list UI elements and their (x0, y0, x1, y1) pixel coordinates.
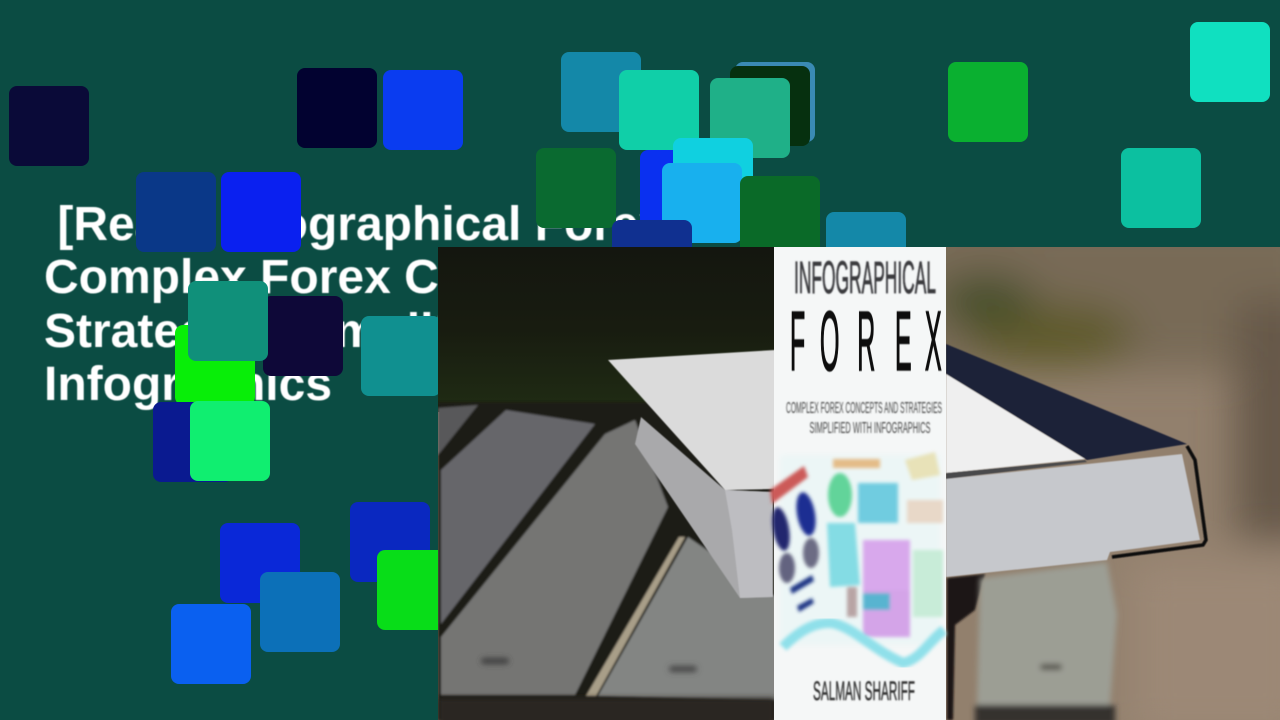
cover wave (783, 623, 944, 663)
square: electric blue (221, 172, 301, 252)
cover artwork (780, 455, 940, 645)
title: Complex Forex Concepts and (44, 251, 721, 304)
book cover: SALMAN SHARIFF (813, 676, 915, 706)
square: bright green (377, 550, 457, 630)
square: blue behind dark green (735, 62, 815, 142)
square: cyan (673, 138, 753, 218)
square: deep green (740, 176, 820, 256)
square: navy (9, 86, 89, 166)
square: lime (175, 325, 255, 405)
cover subtitle: SIMPLIFIED WITH INFOGRAPHICS (810, 420, 930, 437)
open book (608, 344, 1206, 598)
square: teal blue (826, 212, 906, 292)
square: indigo (612, 220, 692, 300)
square: dark violet (263, 296, 343, 376)
bench planks (438, 402, 775, 720)
book cover (769, 247, 946, 720)
square: sea green (1121, 148, 1201, 228)
title: Infographics (44, 358, 332, 411)
square: royal blue (383, 70, 463, 150)
square: green (948, 62, 1028, 142)
square: blue (640, 150, 720, 230)
right bench leg (947, 562, 1117, 720)
square: mint (619, 70, 699, 150)
square: jade (710, 78, 790, 158)
cover forex word: FOREX (790, 295, 942, 389)
square: dark green (730, 66, 810, 146)
square: ocean teal (561, 52, 641, 132)
square: forest (536, 148, 616, 228)
square: emerald (188, 281, 268, 361)
plank bottom shadow (438, 658, 775, 720)
title: [Read] Infographical Forex: (57, 198, 681, 251)
photo: book on bench: COMPLEX FOREX CONCEPTS AND STRATEGIES (786, 400, 942, 417)
square: cobalt (136, 172, 216, 252)
cover subtitle (786, 400, 942, 437)
square: blue right (350, 502, 430, 582)
square: teal (361, 316, 441, 396)
square: sky (662, 163, 742, 243)
blurred background (438, 210, 1280, 720)
square: navy blue (153, 402, 233, 482)
photo: book on bench (438, 247, 1280, 720)
square: bright blue (171, 604, 251, 684)
square: steel blue (260, 572, 340, 652)
title (44, 198, 721, 411)
square: spring green (190, 401, 270, 481)
title: Strategies Simplified with (44, 305, 628, 358)
photo: book on bench: INFOGRAPHICAL (794, 252, 936, 303)
square: blue lower (220, 523, 300, 603)
square: aqua (1190, 22, 1270, 102)
square: midnight (297, 68, 377, 148)
